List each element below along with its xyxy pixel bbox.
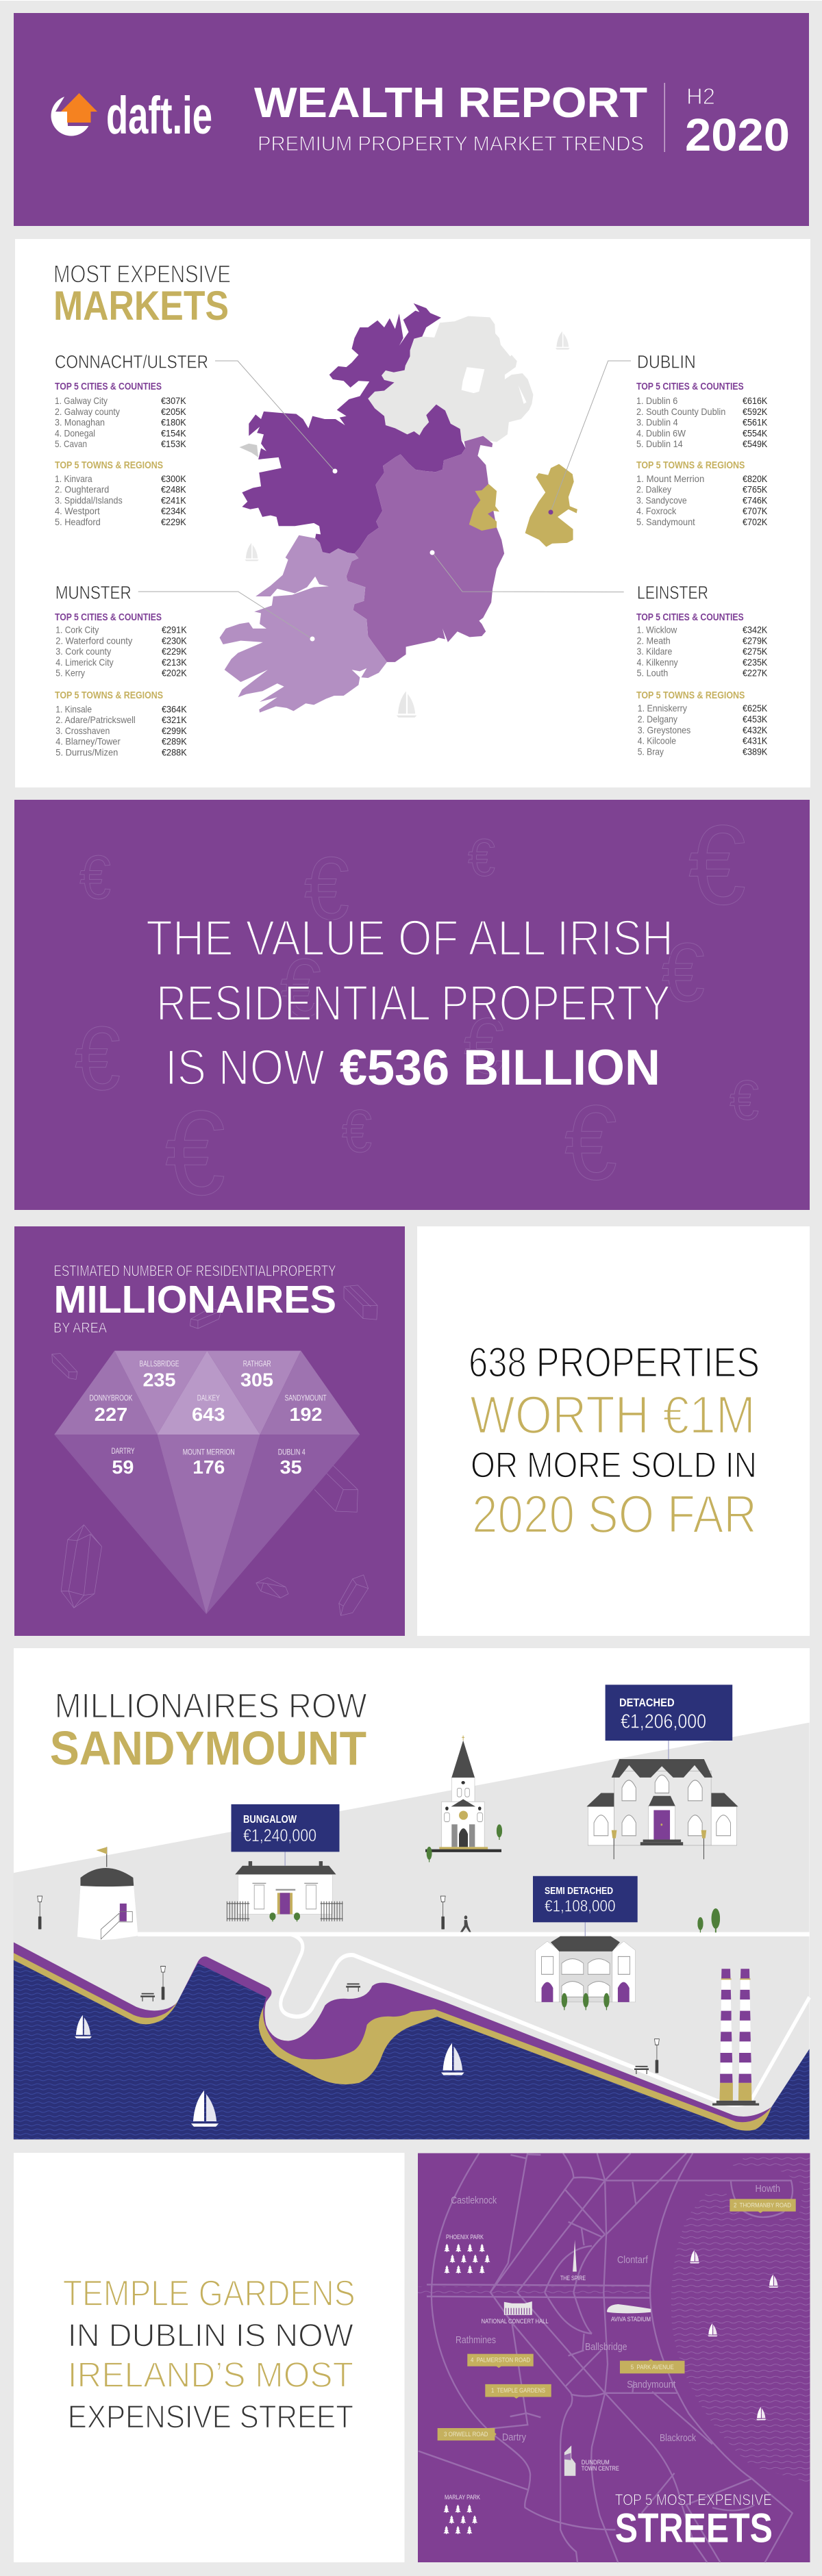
list: Leinster: €279K: [743, 635, 767, 646]
list: Connacht/Ulster: CONNACHT/ULSTER: [55, 352, 208, 372]
data: Dublin 4: 35: [280, 1456, 302, 1478]
list: Connacht/Ulster: 4. Donegal: [55, 428, 95, 438]
data: Sandymount: SANDYMOUNT: [285, 1395, 327, 1403]
data: Ballsbridge: BALLSBRIDGE: [140, 1360, 179, 1368]
bay waves: [671, 2154, 810, 2483]
panel: millionaires row Sandymount: [14, 1648, 810, 2139]
icon: church: [425, 1736, 502, 1862]
icon: benches: [140, 1983, 649, 2074]
panel: Temple Gardens statement: [14, 2153, 404, 2562]
map of Ireland: [220, 303, 577, 718]
coast: gold beach: [14, 1953, 771, 2139]
list: Dublin: €765K: [743, 485, 767, 495]
list: Leinster: [636, 583, 767, 757]
list: Connacht/Ulster: [55, 352, 208, 527]
icon: Aviva Stadium: [607, 2304, 651, 2313]
icon: sailboat north: [556, 331, 570, 349]
data: Dartry: 59: [112, 1456, 134, 1478]
scene: coastal illustration: [14, 1723, 810, 2139]
list: Munster: €288K: [162, 748, 187, 757]
decorative euro outlines: €: [304, 838, 349, 938]
place names: Howth: [755, 2183, 780, 2195]
year: 2020: [685, 110, 790, 161]
list: Connacht/Ulster: 3. Monaghan: [55, 418, 105, 428]
list: Dublin: 2. South County Dublin: [636, 407, 725, 417]
data: Ballsbridge: 235: [142, 1369, 175, 1390]
connector: detached: [668, 1741, 669, 1759]
data: Dalkey: [192, 1395, 225, 1425]
list: Munster: 3. Cork county: [55, 646, 111, 657]
icon: boats on water: [75, 2015, 464, 2127]
street tag labels: 4 PALMERSTON ROAD: [471, 2357, 530, 2364]
connector: bungalow: [285, 1852, 286, 1866]
data: Dartry: DARTRY: [112, 1448, 135, 1456]
list: Leinster: €389K: [743, 746, 767, 757]
list: Connacht/Ulster: 1. Kinvara: [55, 474, 92, 484]
list: Dublin: €592K: [743, 407, 767, 417]
icon: bungalow: [227, 1861, 343, 1921]
data: Ballsbridge: [140, 1360, 179, 1390]
list: Munster: TOP 5 TOWNS & REGIONS: [55, 690, 163, 701]
icon: sailboat south: [397, 691, 416, 718]
decorative euro outlines: €: [662, 926, 705, 1019]
list: Leinster: 4. Kilkenny: [637, 657, 678, 668]
decorative euro outlines: €: [468, 829, 495, 887]
list: Connacht/Ulster: 1. Galway City: [55, 396, 108, 406]
list: Dublin: 3. Dublin 4: [636, 418, 678, 428]
list: Munster: 3. Crosshaven: [55, 726, 110, 736]
list: Dublin: DUBLIN: [637, 352, 696, 372]
statement text: RESIDENTIAL PROPERTY: [156, 976, 671, 1031]
price tag: semi detached: SEMI DETACHED: [545, 1885, 613, 1897]
list: Connacht/Ulster: €300K: [161, 474, 186, 484]
heading: estimated number: ESTIMATED NUMBER OF RESIDENTIALPROPERTY: [53, 1262, 336, 1279]
heading: millionaires: MILLIONAIRES: [53, 1278, 336, 1322]
list: Dublin: [636, 352, 767, 527]
list: Leinster: 2. Delgany: [638, 714, 677, 724]
heading: most expensive: MOST EXPENSIVE: [53, 260, 231, 288]
list: Munster: MUNSTER: [55, 583, 132, 603]
list: Munster: TOP 5 CITIES & COUNTIES: [55, 612, 162, 623]
decorative euro outlines: €: [79, 844, 111, 912]
landmark labels: AVIVA STADIUM: [611, 2316, 651, 2323]
list: Leinster: €453K: [743, 714, 767, 724]
list: Dublin: 3. Sandycove: [636, 495, 687, 505]
heading: markets: MARKETS: [53, 283, 229, 329]
price tag: bungalow: [232, 1804, 340, 1852]
list: Munster: €229K: [162, 646, 187, 657]
title: WEALTH REPORT: [254, 79, 647, 127]
price tag: semi detached: €1,108,000: [545, 1897, 615, 1916]
list: Munster: 4. Blarney/Tower: [55, 737, 121, 747]
icon: Martello tower: [77, 1847, 138, 1940]
list: Munster: €321K: [162, 715, 187, 725]
place names: Dartry: [502, 2432, 526, 2443]
list: Leinster: 1. Wicklow: [637, 624, 677, 635]
heading: Sandymount: SANDYMOUNT: [50, 1721, 366, 1775]
list: Munster: €364K: [162, 704, 187, 714]
period label: H2: [686, 84, 715, 109]
list: Dublin: €707K: [743, 506, 767, 516]
list: Dublin: €554K: [743, 428, 767, 438]
street tag labels: 1 TEMPLE GARDENS: [491, 2387, 545, 2395]
connector: semi detached: [585, 1922, 586, 1936]
list: Leinster: €342K: [743, 624, 767, 635]
decorative euro outlines: €: [75, 1008, 121, 1109]
landmark labels: MARLAY PARK: [445, 2494, 481, 2501]
list: Connacht/Ulster: €307K: [161, 396, 186, 406]
list: Munster: [55, 583, 187, 757]
subtitle: PREMIUM PROPERTY MARKET TRENDS: [258, 132, 644, 155]
statement: or more sold in: OR MORE SOLD IN: [471, 1445, 757, 1486]
data: Dartry: [112, 1448, 135, 1478]
callout: Dublin leader line: [548, 361, 631, 515]
map: Dublin roads and bay: [418, 2154, 810, 2562]
list: Connacht/Ulster: 5. Cavan: [55, 439, 87, 449]
list: Dublin: 4. Dublin 6W: [636, 428, 686, 438]
statement: 2020 so far: 2020 SO FAR: [472, 1484, 757, 1544]
landmark labels: [445, 2234, 651, 2501]
coast: purple promenade: [14, 1943, 771, 2139]
place names: Castleknock: [451, 2195, 497, 2206]
data: Rathgar: [240, 1360, 273, 1390]
icon: National Concert Hall: [504, 2301, 532, 2315]
list: Connacht/Ulster: €154K: [161, 428, 186, 438]
list: Leinster: LEINSTER: [637, 583, 708, 603]
panel: header banner: [14, 13, 809, 226]
decorative euro outlines: €: [688, 802, 746, 928]
icon: daft.ie logo mark: [51, 93, 103, 136]
list: Connacht/Ulster: €248K: [161, 485, 186, 495]
list: Connacht/Ulster: €241K: [161, 495, 186, 505]
list: Munster: €202K: [162, 668, 187, 679]
icon: detached house: [586, 1759, 738, 1859]
data: Dalkey: 643: [192, 1404, 225, 1425]
tag shapes: [438, 2199, 796, 2440]
decorative euro outlines: €: [564, 1083, 617, 1202]
street tag labels: 3 ORWELL ROAD: [444, 2431, 488, 2438]
list: Munster: €213K: [162, 657, 187, 668]
list: Dublin: 4. Foxrock: [636, 506, 676, 516]
decorative euro outlines: [75, 802, 759, 1220]
data: Dublin 4: DUBLIN 4: [278, 1448, 306, 1456]
list: Dublin: €549K: [743, 439, 767, 449]
region: Northern Ireland: [368, 316, 533, 442]
list: Connacht/Ulster: 5. Headford: [55, 517, 101, 527]
landmark labels: PHOENIX PARK: [446, 2234, 484, 2241]
list: Leinster: 3. Kildare: [637, 646, 672, 657]
heading: by area: BY AREA: [53, 1320, 107, 1336]
place names: Clontarf: [617, 2254, 649, 2266]
list: Connacht/Ulster: €234K: [161, 506, 186, 516]
list: Munster: 2. Waterford county: [55, 635, 132, 646]
list: Dublin: 1. Dublin 6: [636, 396, 677, 406]
data: Sandymount: [285, 1395, 327, 1425]
list: Munster: €230K: [162, 635, 187, 646]
list: Dublin: TOP 5 CITIES & COUNTIES: [636, 381, 744, 392]
inset: Dublin enlarged: [525, 464, 577, 547]
statement text: IS NOW: [165, 1040, 325, 1096]
river waves: [418, 2287, 651, 2293]
list: Munster: 5. Durrus/Mizen: [55, 748, 118, 757]
list: Dublin: €746K: [743, 495, 767, 505]
panel: top 5 streets map: [418, 2153, 810, 2562]
list: Munster: €291K: [162, 624, 187, 635]
list: Leinster: 4. Kilcoole: [638, 736, 676, 746]
place names: [451, 2183, 780, 2444]
data: Donnybrook: 227: [95, 1404, 127, 1425]
statement: worth 1M: WORTH €1M: [470, 1385, 756, 1445]
list: Connacht/Ulster: 2. Galway county: [55, 407, 120, 417]
list: Munster: €289K: [162, 737, 187, 747]
data: Mount Merrion: MOUNT MERRION: [183, 1448, 235, 1456]
heading: millionaires row: MILLIONAIRES ROW: [55, 1686, 367, 1726]
region: Connacht and Ulster: [242, 303, 466, 553]
list: Connacht/Ulster: 2. Oughterard: [55, 485, 109, 495]
heading: top 5 most expensive: TOP 5 MOST EXPENSIVE: [615, 2490, 772, 2508]
list: Munster: €299K: [162, 726, 187, 736]
list: Dublin: TOP 5 TOWNS & REGIONS: [636, 460, 745, 471]
list: Leinster: €432K: [743, 725, 767, 735]
list: Dublin: 1. Mount Merrion: [636, 474, 704, 484]
list: Munster: 5. Kerry: [55, 668, 85, 679]
street tag labels: 5 PARK AVENUE: [631, 2364, 674, 2371]
data: Sandymount: 192: [289, 1404, 322, 1425]
icon: Marlay Park trees: [443, 2505, 477, 2534]
place names: Sandymount: [627, 2379, 676, 2390]
panel: most expensive markets: [15, 239, 810, 787]
region: Leinster: [347, 436, 504, 662]
data: Donnybrook: [89, 1395, 133, 1425]
price tag: detached: [606, 1684, 732, 1741]
list: Connacht/Ulster: €180K: [161, 418, 186, 428]
list: Dublin: 2. Dalkey: [636, 485, 671, 495]
list: Munster: 2. Adare/Patrickswell: [55, 715, 136, 725]
callout: Munster leader line: [138, 592, 314, 641]
list: Connacht/Ulster: TOP 5 CITIES & COUNTIES: [55, 381, 162, 392]
panel: total property value: [14, 800, 810, 1220]
landmark labels: NATIONAL CONCERT HALL: [482, 2318, 549, 2325]
list: Munster: 1. Kinsale: [55, 704, 92, 714]
list: Leinster: €227K: [743, 668, 767, 679]
icon: The Spire: [573, 2240, 577, 2271]
panel: 638 properties: [417, 1226, 810, 1636]
list: Leinster: 3. Greystones: [638, 725, 690, 735]
list: Connacht/Ulster: €229K: [161, 517, 186, 527]
icon: semi-detached houses: [536, 1936, 636, 2010]
landmark labels: THE SPIRE: [560, 2275, 586, 2282]
landmark labels: TOWN CENTRE: [582, 2465, 619, 2473]
decorative euro outlines: €: [464, 1002, 504, 1090]
list: Leinster: €625K: [743, 703, 767, 714]
list: Leinster: 1. Enniskerry: [638, 703, 687, 714]
list: Leinster: 5. Bray: [638, 746, 664, 757]
list: Dublin: 5. Sandymount: [636, 517, 695, 527]
list: Leinster: €431K: [743, 736, 767, 746]
statement text: THE VALUE OF ALL IRISH: [146, 911, 673, 966]
landmark labels: DUNDRUM: [582, 2459, 610, 2466]
list: Connacht/Ulster: TOP 5 TOWNS & REGIONS: [55, 460, 163, 471]
list: Leinster: €275K: [743, 646, 767, 657]
decorative euro outlines: €: [730, 1070, 759, 1131]
region: Dublin on map: [469, 484, 499, 531]
ground: [14, 1723, 810, 2139]
icon: pedestrian: [460, 1915, 471, 1932]
island: Achill: [239, 444, 258, 457]
icon: trees: [697, 1908, 720, 1932]
statement text: [146, 911, 673, 1096]
decorative euro outlines: €: [165, 1087, 225, 1220]
callout: Connacht/Ulster leader line: [215, 361, 337, 474]
data: Donnybrook: DONNYBROOK: [89, 1395, 133, 1403]
list: Dublin: €702K: [743, 517, 767, 527]
water: [14, 1960, 810, 2139]
panel: millionaires by area: [14, 1226, 405, 1636]
list: Leinster: TOP 5 TOWNS & REGIONS: [636, 690, 745, 701]
list: Leinster: €235K: [743, 657, 767, 668]
data: Rathgar: RATHGAR: [243, 1360, 271, 1368]
callout: Leinster leader line: [430, 551, 624, 592]
list: Munster: 4. Limerick City: [55, 657, 114, 668]
place names: Rathmines: [456, 2334, 496, 2346]
list: Dublin: €561K: [743, 418, 767, 428]
statement: Temple Gardens: TEMPLE GARDENS: [63, 2273, 356, 2314]
list: Connacht/Ulster: €153K: [161, 439, 186, 449]
data: Mount Merrion: 176: [192, 1456, 225, 1478]
place names: Blackrock: [660, 2432, 696, 2444]
price tag: bungalow: BUNGALOW: [243, 1814, 297, 1826]
heading: streets: STREETS: [615, 2505, 773, 2551]
price tag: detached: €1,206,000: [621, 1711, 706, 1733]
roads: [138, 1934, 810, 2105]
chart: diamond facets: [54, 1351, 360, 1614]
price tag: detached: DETACHED: [619, 1696, 675, 1709]
statement: Ireland's most: IRELAND’S MOST: [68, 2356, 353, 2395]
icon: Dundrum Town Centre: [564, 2445, 575, 2476]
list: Connacht/Ulster: 4. Westport: [55, 506, 100, 516]
data: Dublin 4: [278, 1448, 306, 1478]
list: Leinster: 5. Louth: [637, 668, 668, 679]
list: Connacht/Ulster: 3. Spiddal/Islands: [55, 495, 123, 505]
list: Leinster: TOP 5 CITIES & COUNTIES: [636, 612, 744, 623]
data: Dalkey: DALKEY: [197, 1395, 220, 1403]
statement: in Dublin is now: IN DUBLIN IS NOW: [68, 2317, 354, 2353]
list: Leinster: 2. Meath: [637, 635, 671, 646]
icon: Phoenix Park trees: [444, 2244, 490, 2273]
street tag labels: 2 THORMANBY ROAD: [734, 2202, 791, 2209]
road network: [419, 2154, 793, 2562]
statement: expensive street: EXPENSIVE STREET: [68, 2399, 353, 2435]
list: Connacht/Ulster: €205K: [161, 407, 186, 417]
icon: sailboat west: [245, 543, 259, 561]
logo wordmark: daft.ie: [106, 86, 212, 145]
list: Munster: 1. Cork City: [55, 624, 99, 635]
street tag labels: [444, 2202, 791, 2438]
data: Mount Merrion: [183, 1448, 235, 1478]
decorative crystals: [52, 1285, 377, 1615]
icon: Poolbeg chimneys: [712, 1969, 759, 2106]
statement: 638 properties: 638 PROPERTIES: [469, 1339, 760, 1386]
list: Dublin: 5. Dublin 14: [636, 439, 683, 449]
list: Dublin: €616K: [743, 396, 767, 406]
decorative euro outlines: €: [342, 1097, 372, 1165]
region: Munster: [220, 535, 387, 713]
icon: street lamps: [38, 1896, 659, 2073]
place names: Ballsbridge: [585, 2341, 627, 2353]
data: Rathgar: 305: [240, 1369, 273, 1390]
list: Dublin: €820K: [743, 474, 767, 484]
decorative euro outlines: €: [280, 942, 321, 1034]
price tag: semi detached: [533, 1876, 638, 1922]
icon: bay boats: [690, 2250, 778, 2420]
statement text: €536 BILLION: [340, 1040, 660, 1096]
price tag: bungalow: €1,240,000: [243, 1826, 316, 1845]
